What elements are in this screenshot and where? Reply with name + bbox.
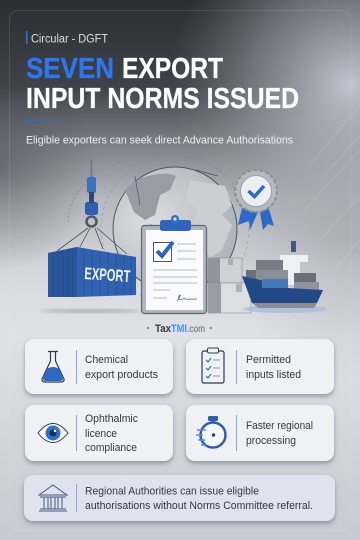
title: INPUT NORMS ISSUED [26, 83, 299, 115]
icon: eye [38, 424, 68, 442]
globe [68, 155, 249, 303]
ship [242, 241, 327, 313]
badge [235, 170, 277, 230]
illustration [40, 155, 327, 314]
text: Chemical [85, 354, 128, 366]
brand: TaxTMI.com: Tax [155, 323, 172, 335]
text: processing [246, 435, 296, 447]
icon: checklist [202, 348, 224, 383]
text [246, 420, 313, 447]
title: SEVEN [26, 53, 114, 85]
callout: regional authorities [24, 475, 335, 521]
crane hook [57, 160, 127, 254]
text: compliance [85, 442, 137, 454]
text [85, 486, 313, 512]
icon: stopwatch [196, 416, 226, 448]
text: export products [85, 369, 158, 381]
text: Ophthalmic [85, 413, 138, 425]
boxes [208, 258, 251, 313]
text: Regional Authorities can issue eligible [85, 486, 259, 498]
subtitle: Eligible exporters can seek direct Advance Authorisations [26, 134, 293, 146]
text [246, 354, 301, 381]
brand: TaxTMI.com: .com [187, 323, 205, 335]
clipboard [142, 215, 206, 314]
container: EXPORT: EXPORT [84, 264, 131, 286]
card: chemical [25, 339, 173, 394]
brand: TaxTMI.com: TMI [171, 323, 187, 335]
card: faster [186, 405, 334, 461]
text: authorisations without Norms Committee referral. [85, 500, 313, 512]
text: Permitted [246, 354, 291, 366]
icon: institution [39, 485, 67, 511]
title [26, 53, 299, 115]
card: ophthalmic [25, 405, 173, 461]
text [85, 354, 158, 381]
title: EXPORT [122, 53, 224, 85]
icon: flask [42, 352, 64, 382]
text [85, 413, 138, 454]
card: permitted [186, 339, 334, 394]
brand: TaxTMI.com [147, 323, 212, 335]
text: licence [85, 428, 117, 440]
tag: Circular - DGFT: Circular - DGFT [31, 34, 108, 46]
text: inputs listed [246, 369, 301, 381]
container: EXPORT [48, 247, 136, 297]
shadow [40, 309, 140, 313]
text: Faster regional [246, 420, 313, 432]
